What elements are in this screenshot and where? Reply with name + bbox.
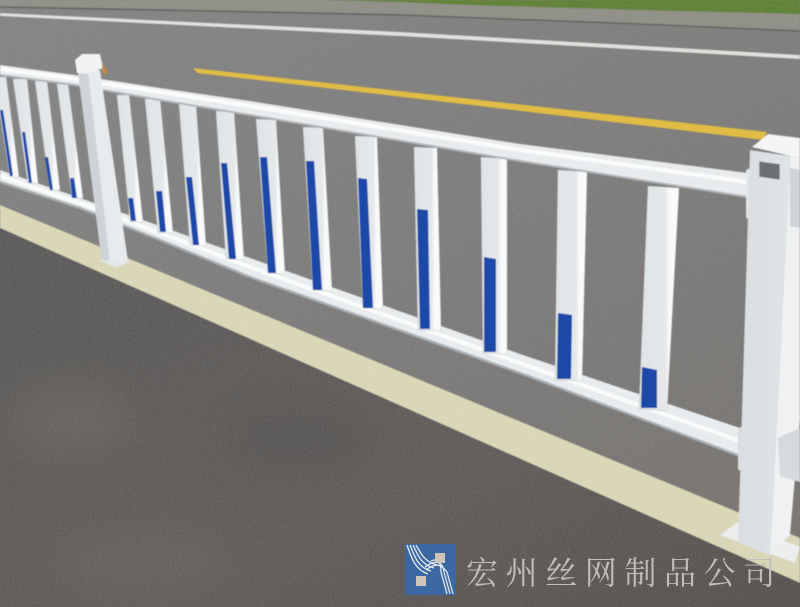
background: kerb and grass strip <box>0 0 800 31</box>
logo emblem stripes <box>407 545 453 594</box>
top rail <box>0 65 748 197</box>
road marking: yellow centre line <box>193 68 767 140</box>
road marking: top white line <box>0 13 800 59</box>
company name: 宏州丝网制品公司 <box>466 555 783 591</box>
company logo <box>405 544 456 595</box>
right post <box>720 134 800 563</box>
left post <box>75 54 131 268</box>
fence pickets <box>0 77 679 411</box>
asphalt tonal patches <box>10 385 370 595</box>
bottom rail <box>0 170 740 456</box>
asphalt foreground <box>0 226 800 607</box>
label plate on post <box>759 161 780 180</box>
road marking: cream edge line <box>0 205 800 583</box>
blue reflective bands <box>0 110 657 408</box>
